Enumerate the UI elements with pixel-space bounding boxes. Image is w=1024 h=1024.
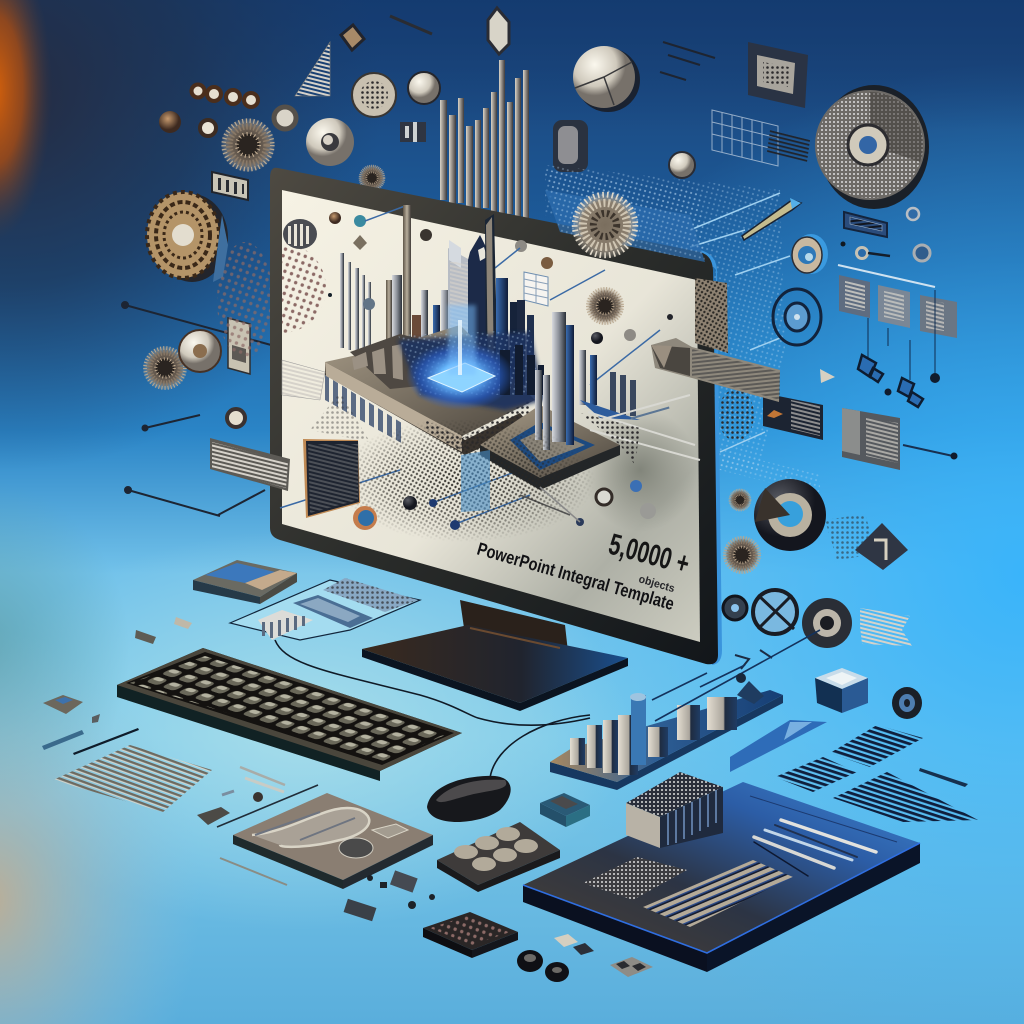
blue glow	[406, 305, 514, 410]
halftone sheet	[583, 857, 687, 900]
front towers	[535, 312, 670, 450]
ring	[227, 409, 245, 427]
cube	[815, 668, 868, 713]
bottom rings	[517, 950, 569, 982]
bezel	[270, 168, 718, 664]
small blocks	[42, 617, 192, 755]
halftone spray	[352, 421, 591, 540]
small rings right	[840, 208, 930, 261]
stripes flag	[860, 608, 912, 646]
line right	[903, 445, 958, 460]
halftone fin	[695, 278, 728, 353]
white disc with hole	[306, 118, 354, 166]
connector lines	[280, 206, 660, 523]
pointer lines	[125, 415, 265, 516]
stripe bundle	[53, 745, 212, 812]
coil disc	[147, 192, 228, 282]
diamond tile	[855, 523, 908, 570]
desk items: left	[42, 560, 653, 982]
small glyphs	[735, 650, 772, 669]
small blocks	[400, 122, 426, 142]
mouse	[427, 776, 511, 822]
pie disc	[573, 46, 640, 112]
chip small	[540, 793, 590, 827]
lined dark panel	[303, 439, 360, 518]
pillar block	[626, 772, 723, 848]
platform main	[325, 325, 545, 455]
floating parts: top row	[159, 8, 930, 470]
ivory disc	[179, 330, 221, 372]
spiky ball light	[571, 191, 639, 259]
mottled blue field	[545, 165, 785, 470]
white bars	[754, 820, 876, 876]
monitor	[270, 168, 722, 711]
hexagon ring	[488, 8, 509, 54]
headline number: 5,0000 +	[605, 528, 693, 581]
dark tray	[233, 793, 433, 889]
thin items	[217, 767, 318, 885]
three rings	[723, 590, 852, 648]
screen dots	[328, 212, 673, 341]
stripes	[767, 130, 810, 162]
screen shading	[582, 408, 698, 532]
ring bronze	[792, 234, 828, 274]
spiky ball	[723, 536, 761, 574]
foreground parts over monitor	[210, 170, 780, 491]
stand neck	[460, 600, 570, 670]
tag block	[212, 172, 248, 200]
large dotted disc	[815, 85, 929, 209]
flat stack	[193, 560, 297, 604]
text lines	[660, 42, 715, 80]
stand base	[362, 625, 628, 711]
pen rod	[742, 198, 801, 240]
square tile	[748, 42, 808, 108]
tag	[228, 318, 250, 374]
right platform	[480, 405, 620, 490]
light rays	[690, 193, 790, 452]
striped badge	[283, 219, 317, 249]
blue speckle	[545, 170, 705, 262]
blue mat	[230, 578, 420, 640]
halftone blob	[217, 242, 273, 358]
striped plates	[775, 725, 978, 822]
spiky ball on screen	[586, 287, 624, 325]
chip	[258, 610, 313, 640]
dotted disc	[352, 73, 396, 117]
small icons	[858, 355, 940, 407]
floating parts: left side	[122, 172, 282, 516]
concentric ring	[773, 289, 821, 345]
spiky ball small	[358, 164, 386, 192]
column block	[842, 408, 900, 470]
small metal ball	[591, 332, 603, 344]
blue plank	[730, 720, 827, 772]
small caption: objects	[637, 573, 676, 595]
halftone ribbon	[580, 413, 640, 465]
tilted square	[341, 25, 364, 50]
brown ball	[159, 111, 181, 133]
triangle	[820, 369, 835, 383]
spiky ball	[221, 118, 275, 172]
ring	[892, 687, 922, 719]
floating parts: right side	[718, 265, 958, 669]
rod top	[390, 16, 432, 34]
right rim	[700, 250, 722, 665]
banner arrow	[651, 338, 780, 402]
tablet base	[523, 782, 920, 972]
screen contents	[280, 205, 700, 614]
small disc	[669, 152, 695, 178]
bottom tiles	[554, 934, 653, 977]
plank highlight	[784, 722, 812, 740]
stripes card	[210, 438, 290, 491]
dark block	[763, 393, 823, 440]
big dark ring	[754, 479, 826, 551]
screen	[282, 190, 700, 642]
keyboard	[117, 648, 462, 781]
halftone square	[825, 514, 877, 560]
grid panel	[712, 110, 778, 166]
bar chart tray	[550, 630, 820, 790]
dotted disc on screen	[282, 243, 326, 333]
template title: PowerPoint Integral Template	[475, 539, 677, 614]
spiky ball	[143, 346, 187, 390]
side stripes	[282, 360, 325, 400]
mini table	[524, 272, 548, 306]
desk items: cables	[275, 640, 590, 778]
ring small	[200, 120, 216, 136]
hex tiles	[437, 822, 560, 892]
capsule block	[553, 120, 588, 172]
pointer line	[122, 302, 282, 348]
little tile	[197, 807, 230, 825]
dotted block	[423, 912, 518, 958]
desk items: right	[523, 630, 978, 972]
staircase triangle	[295, 42, 330, 96]
spiky ball small	[728, 488, 752, 512]
scattered parts	[344, 870, 435, 921]
dotted faint grid	[720, 450, 820, 495]
skyline back	[340, 205, 534, 388]
lined sheet	[643, 860, 793, 927]
tag	[844, 212, 887, 237]
white disc	[408, 72, 440, 104]
cable bundle	[588, 395, 700, 460]
row of rings	[192, 84, 258, 107]
ring	[274, 107, 296, 129]
three panels	[838, 265, 957, 380]
bar chart sculpture	[440, 60, 529, 220]
blue halftone over bezel	[545, 190, 705, 262]
dotted circle	[718, 389, 754, 441]
fin dots	[695, 278, 728, 353]
screen nodes	[353, 480, 656, 530]
